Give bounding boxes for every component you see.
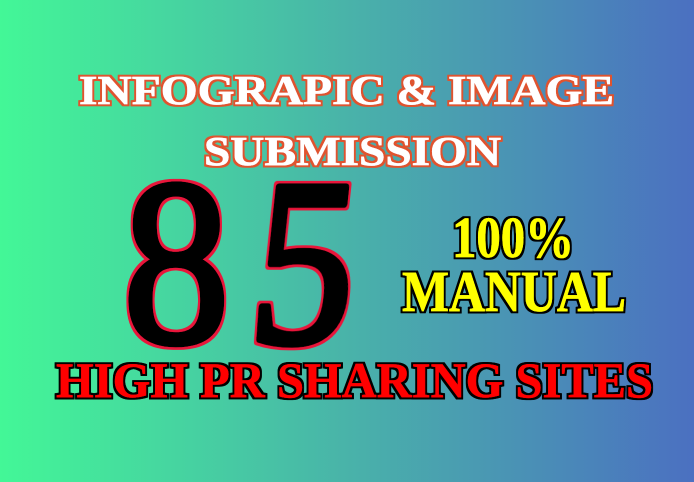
- manual callout: [402, 205, 626, 324]
- title line 2: SUBMISSION: [204, 128, 501, 174]
- big number 85: [123, 130, 370, 394]
- subtitle: high PR sharing sites: HIGH PR SHARING SITES: [56, 352, 653, 408]
- title line 1: INFOGRAPIC & IMAGE: [79, 67, 614, 113]
- digit 5: 5: [241, 130, 370, 393]
- MANUAL label: MANUAL: [402, 259, 626, 324]
- digit 8: 8: [123, 131, 230, 394]
- title: [79, 67, 614, 174]
- 100% label: 100%: [452, 205, 574, 270]
